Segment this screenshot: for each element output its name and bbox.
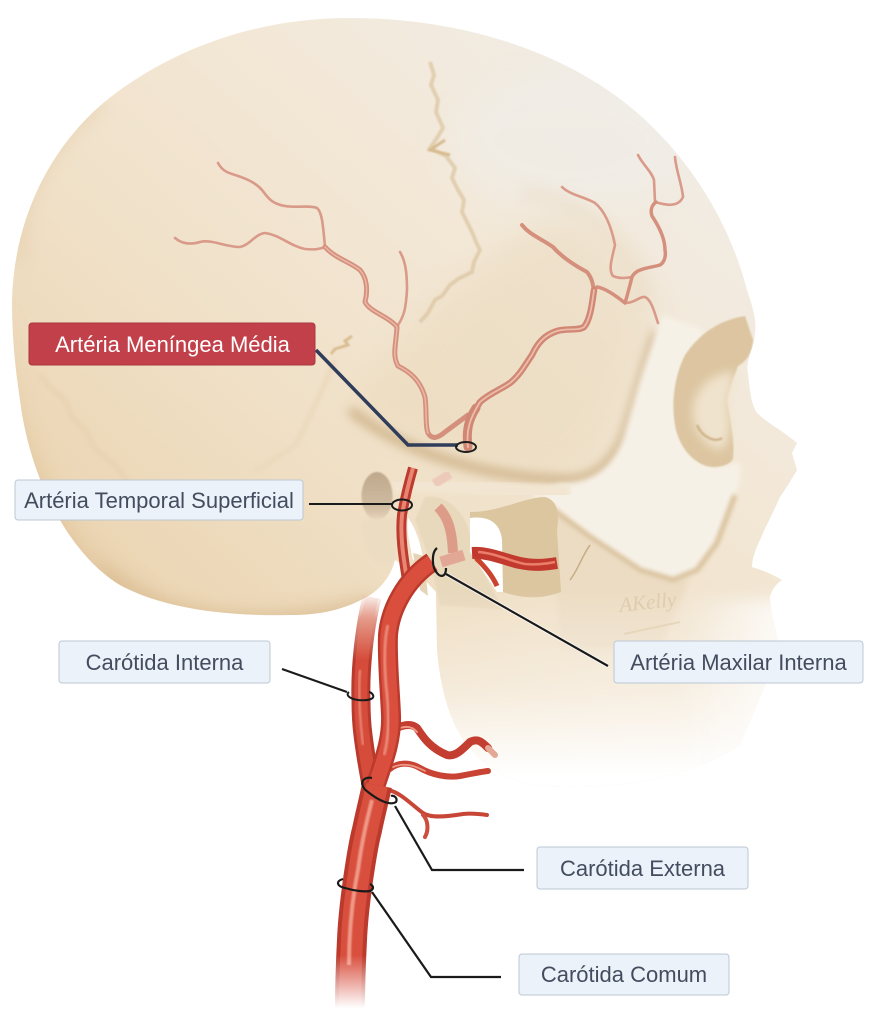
- label: Artéria Temporal Superficial: Artéria Temporal Superficial: [24, 488, 294, 513]
- faint arteries behind bone: [434, 474, 492, 660]
- common carotid artery: [325, 785, 385, 1015]
- zygomatic arch and cheekbone: [530, 315, 740, 580]
- callout leader: Artéria Maxilar Interna: [433, 548, 608, 666]
- label: Carótida Interna: [59, 641, 270, 683]
- label: Artéria Meníngea Média: [29, 323, 315, 365]
- temporal artery: [401, 468, 413, 580]
- condyle: [415, 497, 503, 610]
- label: Artéria Maxilar Interna: Artéria Maxilar Interna: [630, 650, 847, 675]
- callout leader: Carótida Comum: [338, 879, 501, 977]
- top highlight: [479, 135, 518, 174]
- ear canal: [362, 472, 392, 520]
- meningeal arteries: [175, 155, 683, 447]
- label: Artéria Meníngea Média: Artéria Meníngea Média: [55, 332, 291, 357]
- label: Carótida Comum: Carótida Comum: [541, 962, 707, 987]
- fade out of neck and jaw: [437, 622, 762, 786]
- small bone fissure: [331, 336, 352, 354]
- callout leader: Artéria Meníngea Média: [316, 350, 476, 452]
- temporal fossa shadow: [350, 333, 657, 480]
- temporal fossa fill: [380, 220, 653, 468]
- skull: [12, 18, 797, 787]
- label: Carótida Comum: [519, 954, 729, 995]
- below cheek bone patch: [557, 519, 687, 630]
- external carotid artery: [374, 562, 432, 790]
- internal carotid artery: [359, 597, 374, 800]
- callout leader: Carótida Externa: [362, 778, 524, 870]
- signature: AKelly: [616, 587, 678, 617]
- styloid gap: [407, 518, 423, 560]
- mandible ramus line: [570, 545, 590, 580]
- label: Carótida Externa: [537, 847, 748, 889]
- external carotid branches: [388, 725, 495, 837]
- window opening: [470, 518, 503, 592]
- callout leader: Artéria Temporal Superficial: [309, 500, 412, 510]
- label: Carótida Interna: Carótida Interna: [86, 650, 244, 675]
- label: Artéria Temporal Superficial: [15, 480, 303, 520]
- callout leader: Carótida Interna: [282, 669, 373, 700]
- mastoid: [362, 518, 398, 565]
- label: Carótida Externa: Carótida Externa: [560, 856, 726, 881]
- arch: [392, 484, 570, 492]
- cheekbone underside: [540, 495, 735, 580]
- styloid process: [413, 553, 428, 596]
- sphenoid fossa: [470, 497, 561, 597]
- label: Artéria Maxilar Interna: [614, 641, 863, 683]
- signature: [616, 587, 680, 634]
- faint temporal suture: [300, 361, 336, 436]
- cranium left rim shading: [20, 400, 113, 580]
- maxillary artery: [472, 552, 557, 586]
- lambdoid suture: [40, 375, 145, 495]
- coronal suture: [420, 62, 480, 322]
- orbit: [673, 316, 753, 467]
